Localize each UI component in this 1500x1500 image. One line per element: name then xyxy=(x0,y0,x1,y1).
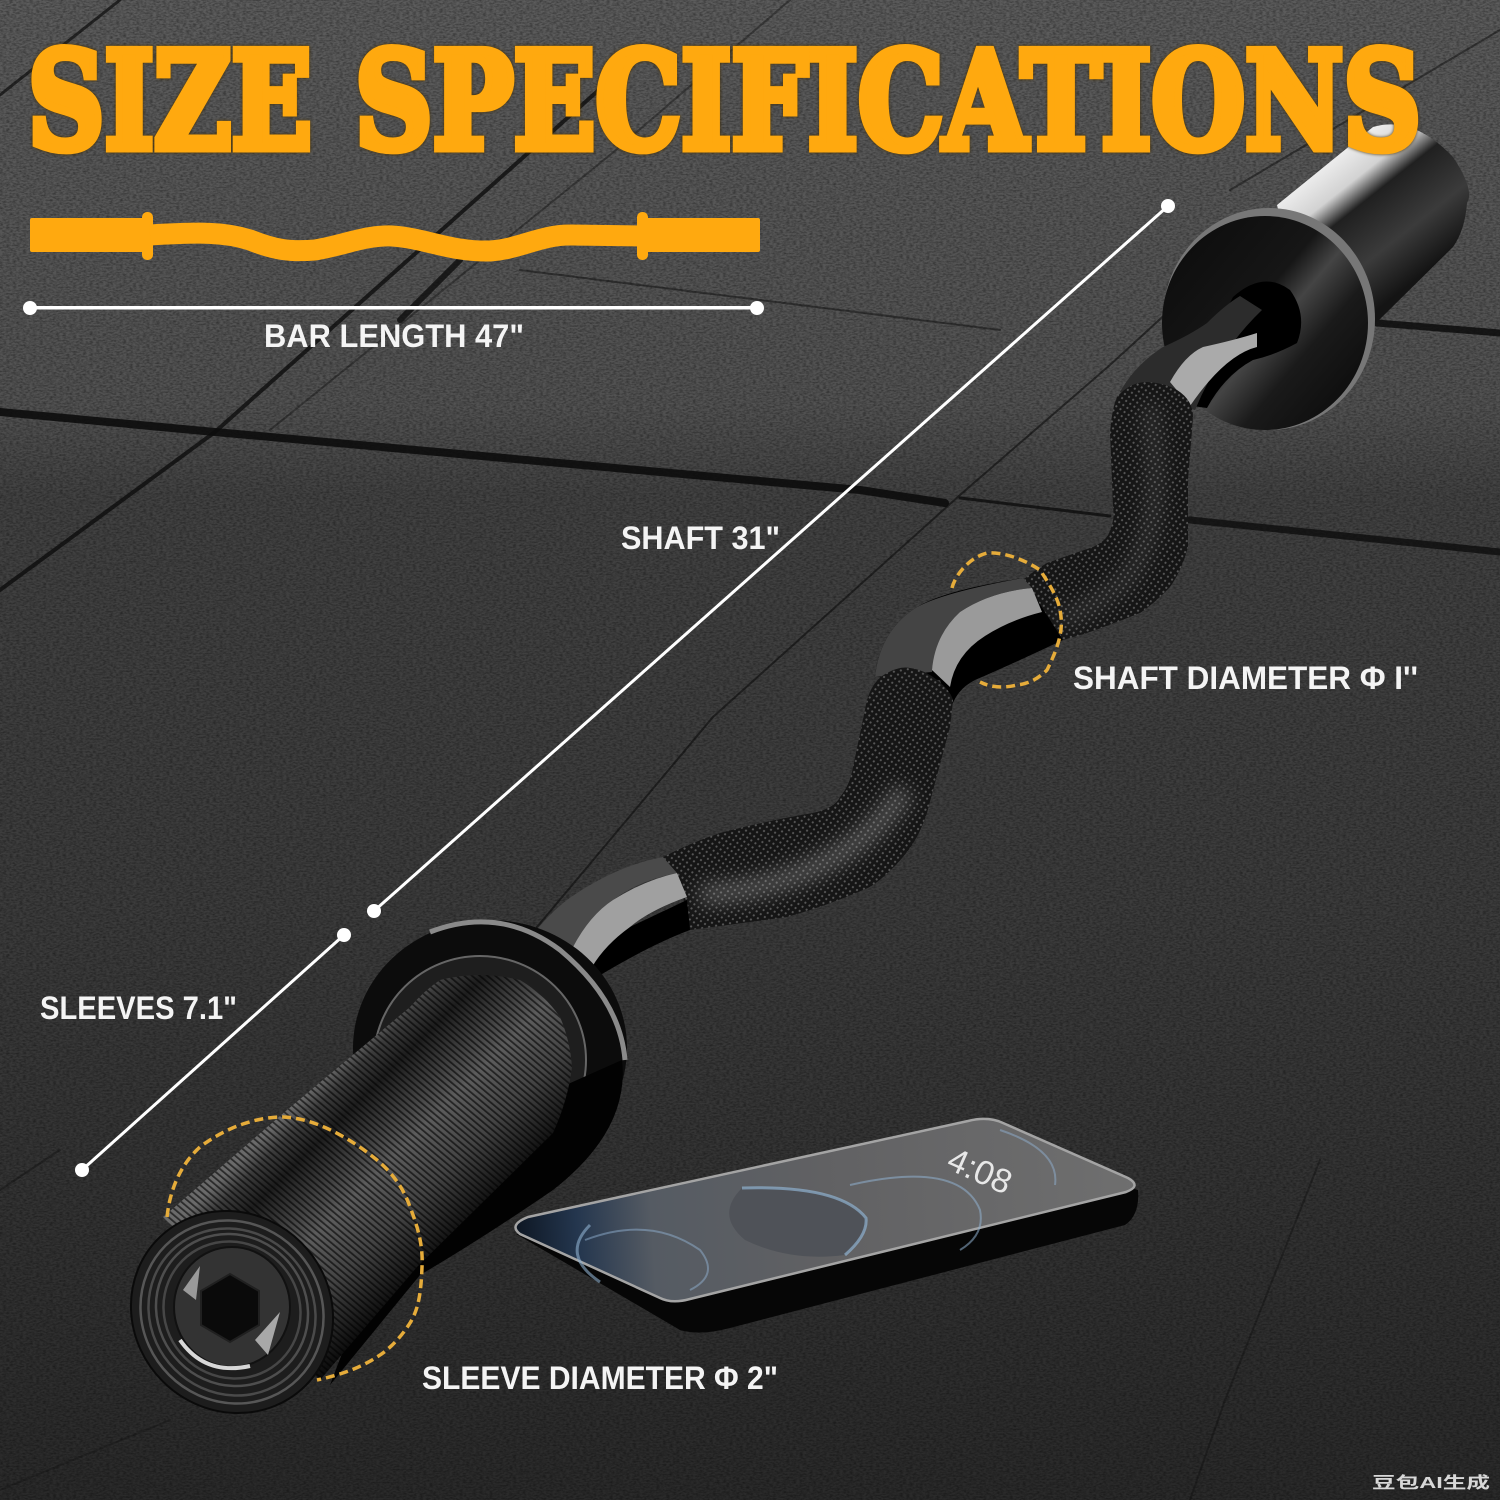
phone xyxy=(516,1119,1138,1333)
icon: orange curl bar silhouette xyxy=(30,212,760,260)
label: sleeves length: SLEEVES 7.1" xyxy=(40,990,237,1026)
shaft: shiny near bend xyxy=(525,857,690,977)
sleeve end face xyxy=(89,1169,375,1455)
dimension line: shaft xyxy=(367,199,1175,918)
label: shaft diameter: SHAFT DIAMETER Φ I'' xyxy=(1073,660,1418,696)
dimension line: bar length xyxy=(23,301,764,315)
shaft: shiny centre bend xyxy=(875,578,1063,712)
silver hub xyxy=(174,1247,290,1367)
shaft: far knurled grip xyxy=(1023,382,1193,640)
far collar xyxy=(1162,208,1375,430)
label: bar length: BAR LENGTH 47" xyxy=(264,318,524,354)
shaft: shiny far bend xyxy=(1120,296,1262,410)
shaft: near knurled grip xyxy=(663,668,953,930)
watermark: 豆包AI生成 xyxy=(1372,1473,1490,1492)
phone body and shadow xyxy=(516,1150,1138,1333)
dashed ring: sleeve diameter xyxy=(167,1117,422,1380)
dashed ring: shaft diameter xyxy=(952,553,1061,687)
title: SIZE xyxy=(28,22,312,180)
hex socket xyxy=(201,1274,259,1342)
far sleeve xyxy=(1277,124,1469,322)
clock: 4:08 xyxy=(942,1141,1018,1202)
label: sleeve diameter: SLEEVE DIAMETER Φ 2" xyxy=(422,1360,778,1396)
wallpaper planets xyxy=(577,1130,1055,1290)
phone screen xyxy=(516,1119,1135,1301)
dimension line: sleeves xyxy=(75,928,351,1177)
label: shaft length: SHAFT 31" xyxy=(621,520,780,556)
near sleeve shadow xyxy=(330,1060,623,1385)
near collar xyxy=(353,920,627,1176)
near sleeve xyxy=(163,975,572,1380)
